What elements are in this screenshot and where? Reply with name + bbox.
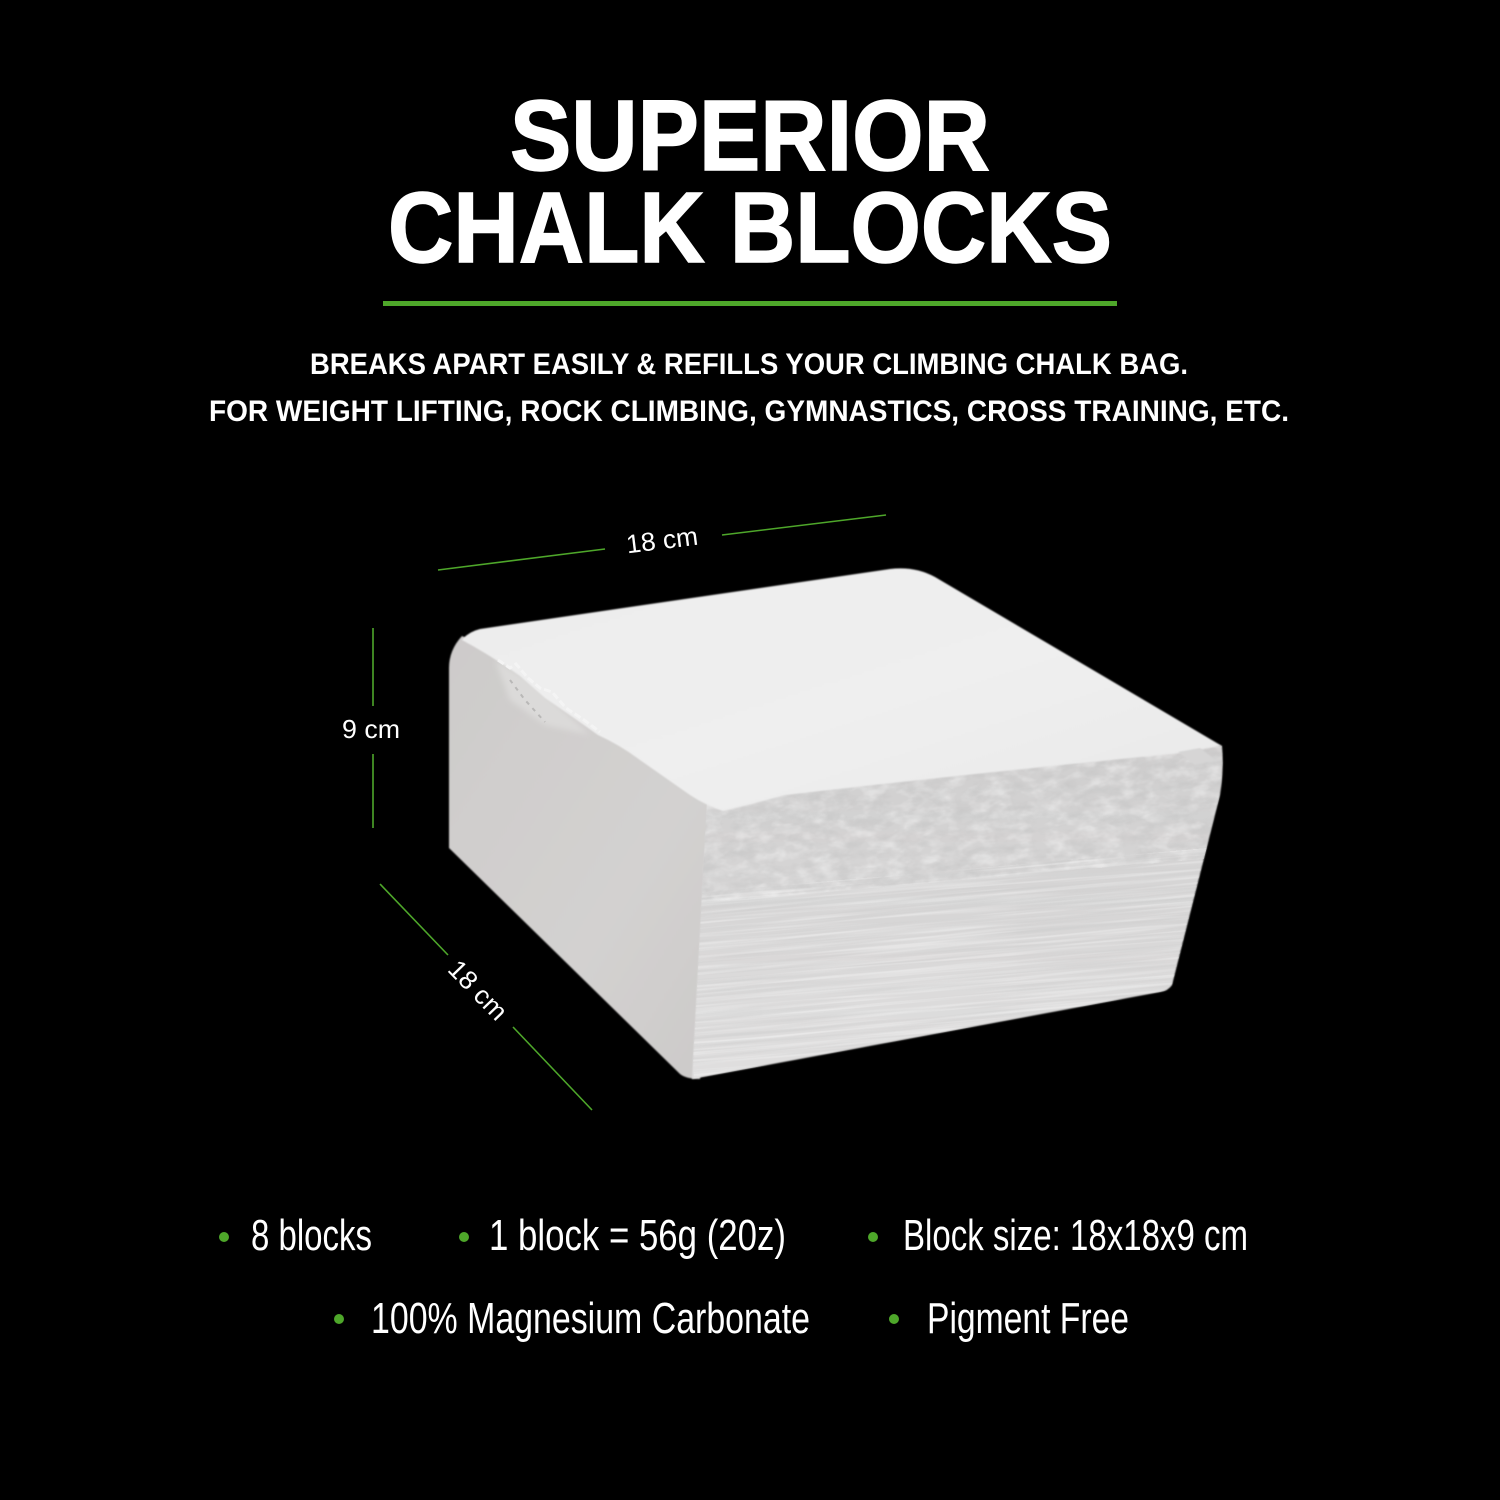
dimension: height 9 cm: 9 cm [342,714,400,744]
top right corner chip [1178,748,1215,765]
feature: 8 blocks [219,1211,372,1260]
feature: 8 blocks: 8 blocks [251,1211,372,1260]
feature: pigment free: Pigment Free [927,1294,1129,1343]
chipped area on left face [495,660,590,735]
dimension: depth 18 cm [380,884,592,1110]
top face [462,568,1222,811]
feature: material: 100% Magnesium Carbonate [371,1294,810,1343]
chipped edge [498,660,600,732]
title: CHALK BLOCKS [388,172,1112,284]
feature: block weight: 1 block = 56g (20z) [489,1211,786,1260]
dimension: top width 18 cm: 18 cm [624,521,700,559]
front face [692,742,1223,1079]
subtitle text: FOR WEIGHT LIFTING, ROCK CLIMBING, GYMNASTICS, CROSS TRAINING, ETC. [209,395,1289,428]
left face [449,636,730,1079]
chalk block illustration [448,567,1224,1080]
subtitle text: BREAKS APART EASILY & REFILLS YOUR CLIMBING CHALK BAG. [310,348,1188,381]
feature: block size: Block size: 18x18x9 cm [903,1211,1248,1260]
dimension: depth 18 cm: 18 cm [442,954,514,1026]
dimension: top width 18 cm [438,515,886,570]
feature: block size [868,1211,1248,1260]
feature list [219,1211,1248,1343]
title [388,80,1112,284]
title: SUPERIOR [510,80,990,192]
feature: pigment free [889,1294,1129,1343]
front face texture [694,746,1223,1078]
subtitle text [209,348,1289,428]
infographic canvas [210,99,1288,1342]
green divider [383,301,1117,306]
